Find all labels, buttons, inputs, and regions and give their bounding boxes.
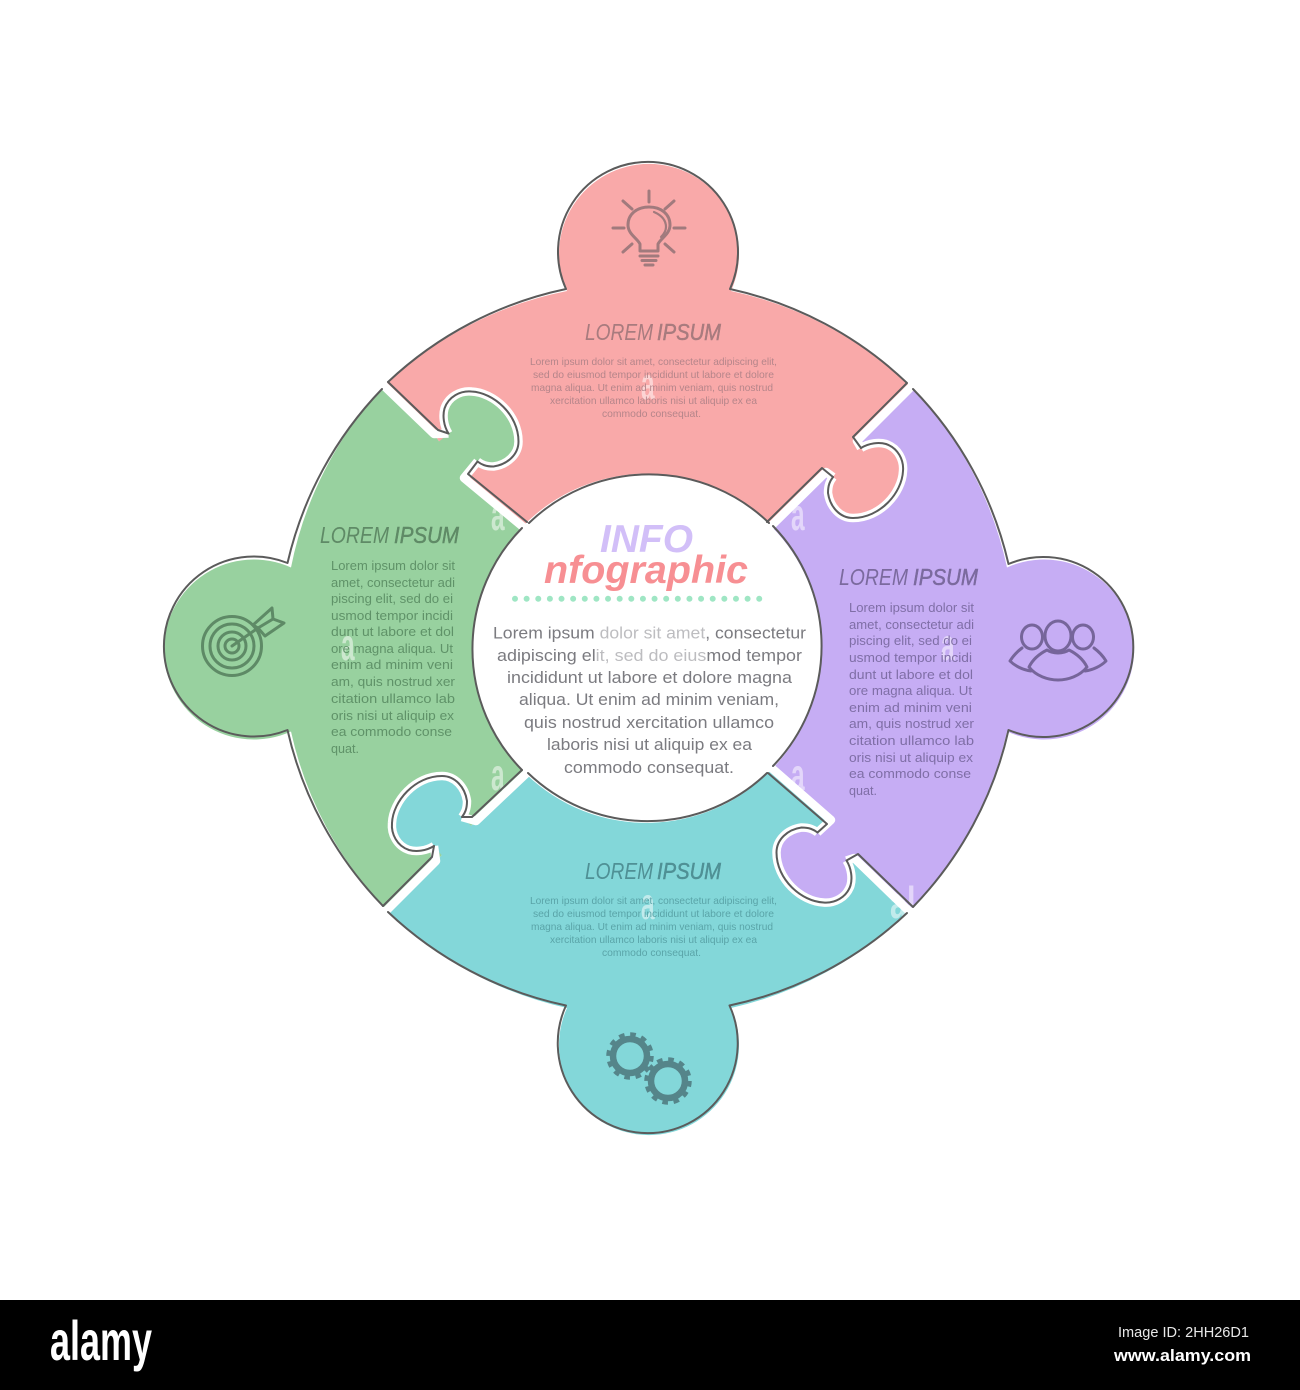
watermark letters: a bbox=[641, 879, 655, 929]
panel text: left piece: citation ullamco lab bbox=[331, 691, 455, 706]
panel text: left piece: enim ad minim veni bbox=[331, 657, 453, 672]
heading: right piece: LOREM bbox=[839, 564, 909, 590]
panel text: bottom piece: magna aliqua. Ut enim ad minim veniam, quis nostrud bbox=[531, 921, 773, 933]
center title: nfographic bbox=[544, 549, 748, 592]
icon: target with arrow bbox=[202, 608, 284, 676]
center paragraph bbox=[493, 624, 806, 777]
panel text: right piece: piscing elit, sed do ei bbox=[849, 633, 972, 648]
puzzle outline bbox=[164, 162, 1133, 1133]
center paragraph: incididunt ut labore et dolore magna bbox=[507, 668, 793, 687]
center paragraph: adipiscing el it, sed do eius mod tempor bbox=[497, 646, 802, 665]
panel text: left piece: am, quis nostrud xer bbox=[331, 674, 456, 689]
panel: left green piece bbox=[164, 386, 526, 910]
heading: right piece bbox=[839, 564, 979, 590]
panel text: top piece: Lorem ipsum dolor sit amet, consectetur adipiscing elit, bbox=[530, 356, 777, 368]
watermark letters bbox=[341, 359, 955, 929]
icon: group of people bbox=[1010, 621, 1106, 680]
heading: top piece: IPSUM bbox=[657, 319, 722, 345]
panel text: bottom piece: sed do eiusmod tempor incididunt ut labore et dolore bbox=[533, 908, 774, 920]
panel text: top piece: magna aliqua. Ut enim ad minim veniam, quis nostrud bbox=[531, 382, 773, 394]
heading: bottom piece bbox=[585, 858, 722, 884]
icon: light bulb bbox=[613, 191, 685, 265]
watermark letters: a bbox=[791, 490, 805, 540]
center title bbox=[544, 518, 748, 592]
heading: left piece: IPSUM bbox=[394, 522, 460, 548]
panel text: left piece: quat. bbox=[331, 741, 359, 756]
icon: gears bbox=[608, 1034, 690, 1102]
center paragraph: aliqua. Ut enim ad minim veniam, bbox=[519, 690, 779, 709]
watermark letters: a bbox=[491, 750, 505, 800]
panel text: right piece: ore magna aliqua. Ut bbox=[849, 683, 972, 698]
center paragraph: commodo consequat. bbox=[564, 758, 734, 777]
center paragraph: Lorem ipsum dolor sit amet, consectetur bbox=[493, 624, 806, 642]
red puzzle tab bbox=[818, 432, 903, 518]
panel text: left piece: piscing elit, sed do ei bbox=[331, 591, 453, 606]
center paragraph: quis nostrud xercitation ullamco bbox=[524, 713, 774, 732]
teal puzzle tab bbox=[392, 776, 478, 862]
panel text: right piece: dunt ut labore et dol bbox=[849, 667, 973, 682]
panel: right purple piece bbox=[771, 387, 1134, 911]
panel text: right piece: Lorem ipsum dolor sit bbox=[849, 600, 974, 615]
dotted divider bbox=[515, 596, 760, 602]
heading: bottom piece: LOREM bbox=[585, 858, 654, 884]
heading: left piece bbox=[320, 522, 460, 548]
watermark letters: a bbox=[641, 359, 655, 409]
panel text: left piece: usmod tempor incidi bbox=[331, 608, 453, 623]
panel text: left piece: dunt ut labore et dol bbox=[331, 624, 454, 639]
panel text: bottom piece: commodo consequat. bbox=[602, 947, 701, 959]
footer image id: Image ID: 2HH26D1 bbox=[1118, 1324, 1249, 1341]
panel text: left piece: Lorem ipsum dolor sit bbox=[331, 558, 455, 573]
watermark letters: a bbox=[491, 490, 505, 540]
panel text: right piece: amet, consectetur adi bbox=[849, 617, 974, 632]
center paragraph: laboris nisi ut aliquip ex ea bbox=[547, 735, 753, 754]
panel text: right piece: citation ullamco lab bbox=[849, 733, 974, 748]
panel text: right piece: ea commodo conse bbox=[849, 766, 971, 781]
panel text: top piece: sed do eiusmod tempor incididunt ut labore et dolore bbox=[533, 369, 774, 381]
purple puzzle tab bbox=[776, 817, 862, 903]
panel text: top piece bbox=[530, 319, 777, 420]
heading: right piece: IPSUM bbox=[913, 564, 979, 590]
panel text: top piece: commodo consequat. bbox=[602, 408, 701, 420]
watermark letters: a bbox=[791, 750, 805, 800]
heading: top piece: LOREM bbox=[585, 319, 654, 345]
panel text: top piece: xercitation ullamco laboris nisi ut aliquip ex ea bbox=[550, 395, 757, 407]
watermark letters: a bbox=[341, 620, 355, 670]
panel text: left piece: oris nisi ut aliquip ex bbox=[331, 708, 455, 723]
watermark letters: al bbox=[890, 880, 916, 928]
panel text: right piece: oris nisi ut aliquip ex bbox=[849, 750, 974, 765]
panel text: left piece: ea commodo conse bbox=[331, 724, 452, 739]
heading: left piece: LOREM bbox=[320, 522, 390, 548]
panel text: bottom piece: Lorem ipsum dolor sit amet, consectetur adipiscing elit, bbox=[530, 895, 777, 907]
panel: bottom teal piece bbox=[387, 769, 909, 1135]
panel: top red piece bbox=[384, 164, 911, 526]
green puzzle tab bbox=[432, 391, 518, 477]
heading: bottom piece: IPSUM bbox=[657, 858, 722, 884]
center title: INFO bbox=[600, 518, 693, 561]
footer url: www.alamy.com bbox=[1113, 1346, 1251, 1365]
panel text: bottom piece bbox=[530, 858, 777, 959]
panel text: right piece: enim ad minim veni bbox=[849, 700, 972, 715]
watermark letters: a bbox=[941, 620, 955, 670]
heading: top piece bbox=[585, 319, 722, 345]
panel text: bottom piece: xercitation ullamco laboris nisi ut aliquip ex ea bbox=[550, 934, 757, 946]
panel text: right piece bbox=[839, 564, 979, 798]
panel text: left piece: amet, consectetur adi bbox=[331, 575, 455, 590]
panel text: left piece: ore magna aliqua. Ut bbox=[331, 641, 453, 656]
panel text: left piece bbox=[320, 522, 460, 756]
panel text: right piece: am, quis nostrud xer bbox=[849, 716, 975, 731]
puzzle piece fills bbox=[164, 164, 1134, 1135]
panel text: right piece: usmod tempor incidi bbox=[849, 650, 972, 665]
footer bar bbox=[0, 1300, 1300, 1390]
footer logo: alamy bbox=[50, 1309, 152, 1372]
panel text: right piece: quat. bbox=[849, 783, 877, 798]
